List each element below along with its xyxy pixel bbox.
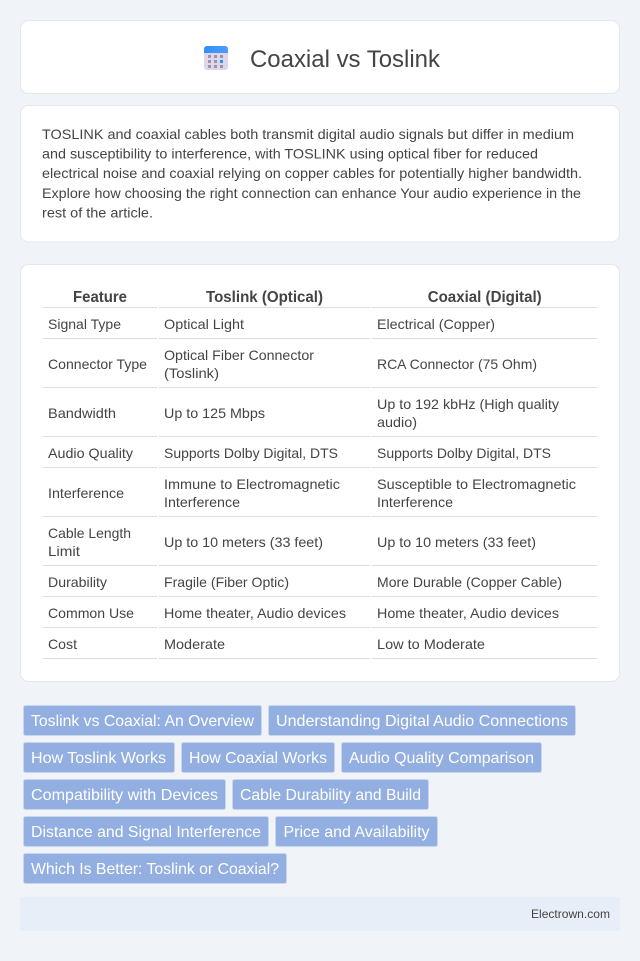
intro paragraph: rest of the article. <box>42 204 153 220</box>
row: bandwidth: Up to 125 Mbps <box>164 405 265 421</box>
row: cable length limit <box>48 525 536 559</box>
row: common use <box>48 605 559 621</box>
row: connector type: RCA Connector (75 Ohm) <box>377 356 537 372</box>
row: cost: Moderate <box>164 636 225 652</box>
row: cable length limit: Up to 10 meters (33 feet) <box>164 534 323 550</box>
row: audio quality: Supports Dolby Digital, DTS <box>377 445 551 461</box>
title: Coaxial vs Toslink <box>250 46 441 73</box>
table header row: Coaxial (Digital) <box>428 289 542 306</box>
row: durability: Durability <box>48 574 107 590</box>
tag: how toslink works: How Toslink Works <box>31 750 166 767</box>
intro paragraph: electrical noise and coaxial relying on copper cables for potentially higher bandwidth. <box>42 165 582 181</box>
row: audio quality <box>48 445 551 461</box>
tag: distance and interference: Distance and Signal Interference <box>31 824 261 841</box>
row: bandwidth: Bandwidth <box>48 405 116 421</box>
tag: cable durability <box>232 780 428 810</box>
table header row: Feature <box>73 289 127 306</box>
table header row <box>73 289 542 306</box>
tag: distance and interference <box>24 816 268 846</box>
row: bandwidth <box>48 396 559 430</box>
footer: Electrown.com <box>531 907 610 921</box>
row: cable length limit: Up to 10 meters (33 feet) <box>377 534 536 550</box>
row: connector type: Optical Fiber Connector <box>164 347 314 363</box>
tag: how coaxial works: How Coaxial Works <box>189 750 327 767</box>
intro paragraph: Explore how choosing the right connection can enhance Your audio experience in the <box>42 185 581 201</box>
header panel <box>20 20 620 94</box>
row: signal type: Electrical (Copper) <box>377 316 495 332</box>
row: cable length limit: Limit <box>48 543 80 559</box>
row: interference <box>48 476 576 510</box>
row: cost: Low to Moderate <box>377 636 485 652</box>
icon: calendar <box>204 46 228 70</box>
tag: compatibility <box>24 780 226 810</box>
tag: price <box>276 816 438 846</box>
row: bandwidth: Up to 192 kbHz (High quality <box>377 396 559 412</box>
tag: how coaxial works <box>182 742 334 772</box>
row: signal type: Signal Type <box>48 316 121 332</box>
tag: price: Price and Availability <box>284 824 430 841</box>
tag: digital audio connections: Understanding Digital Audio Connections <box>276 713 568 730</box>
row: cable length limit: Cable Length <box>48 525 131 541</box>
row: common use: Home theater, Audio devices <box>164 605 346 621</box>
row: audio quality: Audio Quality <box>48 445 133 461</box>
panel: intro text <box>20 106 620 242</box>
tag: which is better: Which Is Better: Toslink or Coaxial? <box>31 861 279 878</box>
row: audio quality: Supports Dolby Digital, DTS <box>164 445 338 461</box>
tag: audio quality comparison <box>342 742 542 772</box>
tag: overview: Toslink vs Coaxial: An Overview <box>31 713 254 730</box>
tag: digital audio connections <box>268 706 576 736</box>
panel: comparison table <box>20 264 620 682</box>
row: cost <box>48 636 485 652</box>
intro paragraph <box>42 126 582 220</box>
tag: compatibility: Compatibility with Devices <box>31 787 218 804</box>
tag: audio quality comparison: Audio Quality Comparison <box>349 750 534 767</box>
row: cost: Cost <box>48 636 77 652</box>
topic tags <box>24 706 576 884</box>
table rules <box>43 307 597 659</box>
row: interference: Interference <box>164 494 240 510</box>
tag: how toslink works <box>24 742 174 772</box>
row: common use: Home theater, Audio devices <box>377 605 559 621</box>
row: interference: Interference <box>377 494 453 510</box>
row: interference: Interference <box>48 485 124 501</box>
footer <box>20 897 620 931</box>
intro paragraph: TOSLINK and coaxial cables both transmit digital audio signals but differ in medium <box>42 126 574 142</box>
row: common use: Common Use <box>48 605 134 621</box>
row: interference: Immune to Electromagnetic <box>164 476 340 492</box>
intro paragraph: and susceptibility to interference, with TOSLINK using optical fiber for reduced <box>42 146 538 162</box>
row: signal type <box>48 316 495 332</box>
tag: cable durability: Cable Durability and Build <box>240 787 421 804</box>
row: durability <box>48 574 562 590</box>
row: connector type: Connector Type <box>48 356 147 372</box>
tag: overview <box>24 706 262 736</box>
row: durability: Fragile (Fiber Optic) <box>164 574 289 590</box>
tag: which is better <box>24 854 286 884</box>
row: durability: More Durable (Copper Cable) <box>377 574 562 590</box>
row: interference: Susceptible to Electromagnetic <box>377 476 576 492</box>
row: connector type: (Toslink) <box>164 365 219 381</box>
table header row: Toslink (Optical) <box>206 289 323 306</box>
row: signal type: Optical Light <box>164 316 244 332</box>
row: bandwidth: audio) <box>377 414 417 430</box>
row: connector type <box>48 347 537 381</box>
